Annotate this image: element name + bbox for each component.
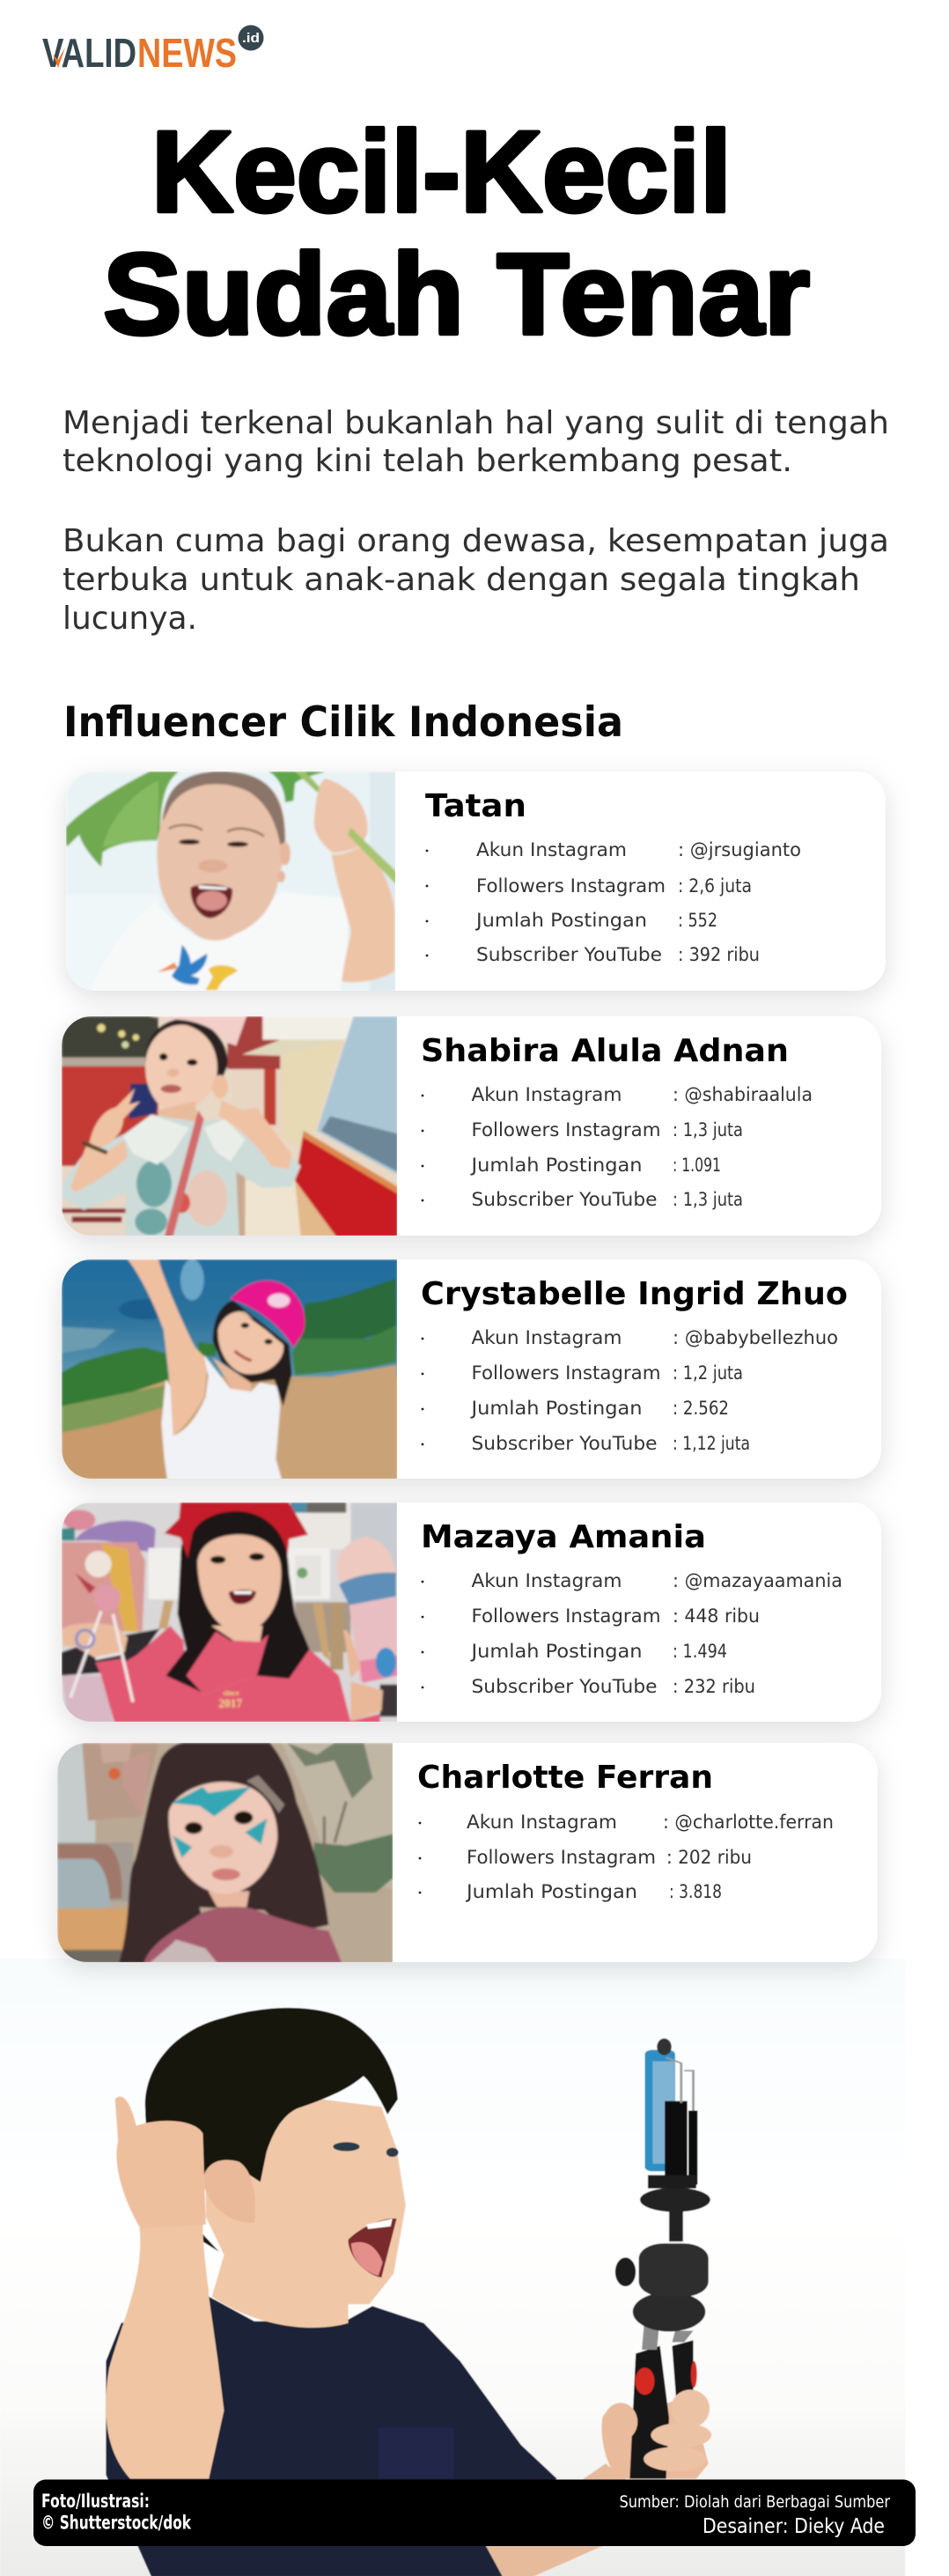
stats: Shabira: : 1.091: [673, 1155, 721, 1176]
stats: Crystabelle: Jumlah Postingan: [469, 1398, 643, 1419]
source and designer credit: Desainer: Dieky Ade: [703, 2515, 885, 2538]
panel: Mazaya Amania: [62, 1502, 881, 1723]
stats: Charlotte: : 3.818: [669, 1881, 722, 1902]
stats: Mazaya: : 232 ribu: [673, 1676, 755, 1697]
intro paragraph 2: Bukan cuma bagi orang dewasa, kesempatan juga: [63, 523, 889, 559]
section heading: Influencer Cilik Indonesia: [63, 698, 623, 747]
stats: Mazaya: Followers Instagram: [472, 1605, 660, 1627]
stats: Shabira: Akun Instagram: [472, 1084, 622, 1105]
title: Sudah Tenar: [103, 229, 810, 358]
photo credit: Foto/Ilustrasi:: [41, 2491, 150, 2512]
stats: Shabira: Followers Instagram: [472, 1119, 660, 1140]
photo: Tatan: [66, 771, 396, 992]
panel: Crystabelle Ingrid Zhuo: [62, 1259, 881, 1480]
stats: Shabira: : @shabiraalula: [673, 1084, 813, 1105]
name: Tatan: Tatan: [425, 788, 526, 824]
stats: Shabira: Jumlah Postingan: [469, 1155, 643, 1176]
name: Shabira: Shabira Alula Adnan: [421, 1033, 789, 1069]
stats: Charlotte: : @charlotte.ferran: [663, 1812, 834, 1833]
photo: Crystabelle: [62, 1259, 398, 1480]
stats: Shabira: : 1,3 juta: [673, 1119, 743, 1140]
photo credit: © Shutterstock/dok: [41, 2512, 192, 2533]
stats: Crystabelle: [422, 1327, 838, 1454]
stats: Tatan: Subscriber YouTube: [476, 944, 662, 965]
photo: Mazaya: 2017: [218, 1696, 242, 1709]
stats: Mazaya: : @mazayaamania: [673, 1570, 842, 1591]
stats: Mazaya: : 1.494: [673, 1641, 727, 1662]
stats: Mazaya: Akun Instagram: [472, 1570, 622, 1591]
stats: Mazaya: Subscriber YouTube: [472, 1676, 657, 1697]
stats: Tatan: Jumlah Postingan: [474, 910, 647, 931]
stats: Tatan: [426, 839, 801, 965]
photo: Charlotte: [57, 1743, 394, 1963]
stats: Tatan: : 552: [678, 910, 717, 931]
stats: Tatan: : 392 ribu: [678, 944, 760, 965]
source and designer credit: Sumber: Diolah dari Berbagai Sumber: [620, 2492, 890, 2512]
stats: Tatan: : @jrsugianto: [678, 839, 801, 860]
panel: Tatan: [66, 771, 886, 992]
intro paragraph 1: [63, 405, 889, 479]
intro paragraph 2: terbuka untuk anak-anak dengan segala tingkah: [63, 562, 860, 598]
stats: Tatan: Followers Instagram: [476, 875, 666, 897]
photo: Shabira: [62, 1016, 398, 1236]
stats: Shabira: : 1,3 juta: [673, 1189, 743, 1210]
stats: Mazaya: [422, 1570, 842, 1697]
stats: Charlotte: [419, 1812, 834, 1902]
stats: Mazaya: : 448 ribu: [673, 1605, 760, 1627]
credit bar: [33, 2480, 916, 2546]
stats: Charlotte: : 202 ribu: [666, 1847, 752, 1868]
stats: Mazaya: Jumlah Postingan: [469, 1641, 643, 1662]
name: Mazaya: Mazaya Amania: [421, 1519, 706, 1555]
bottom photo: boy filming himself with phone on tripod: [0, 1959, 905, 2576]
stats: Crystabelle: : 2.562: [673, 1398, 729, 1419]
stats: Crystabelle: : @babybellezhuo: [673, 1327, 838, 1348]
logo: Validnews.id: .id: [242, 31, 260, 46]
photo: Mazaya: since: [223, 1688, 239, 1697]
stats: Tatan: : 2,6 juta: [678, 875, 752, 897]
stats: Crystabelle: : 1,2 juta: [673, 1362, 743, 1384]
panel: Charlotte Ferran: [57, 1743, 878, 1963]
photo: Mazaya: [62, 1502, 398, 1723]
panel: Shabira Alula Adnan: [62, 1016, 881, 1236]
stats: Crystabelle: Akun Instagram: [472, 1327, 622, 1348]
intro paragraph 1: teknologi yang kini telah berkembang pesat.: [63, 443, 792, 479]
title: [103, 107, 810, 358]
stats: Tatan: Akun Instagram: [476, 839, 627, 860]
stats: Charlotte: Akun Instagram: [467, 1812, 617, 1833]
stats: Shabira: Subscriber YouTube: [472, 1189, 657, 1210]
stats: Crystabelle: : 1,12 juta: [673, 1433, 750, 1454]
logo: Validnews.id: [42, 25, 264, 76]
intro paragraph 2: lucunya.: [63, 601, 197, 637]
stats: Charlotte: Jumlah Postingan: [465, 1881, 637, 1902]
name: Charlotte: Charlotte Ferran: [417, 1760, 713, 1796]
name: Crystabelle: Crystabelle Ingrid Zhuo: [421, 1276, 848, 1312]
title: Kecil-Kecil: [151, 107, 732, 236]
stats: Charlotte: Followers Instagram: [467, 1847, 656, 1868]
intro paragraph 1: Menjadi terkenal bukanlah hal yang sulit di tengah: [63, 405, 889, 441]
intro paragraph 2: [63, 523, 889, 637]
source and designer credit: [620, 2492, 890, 2538]
stats: Shabira: [422, 1084, 813, 1210]
logo: Validnews.id: NEWS: [137, 30, 237, 76]
stats: Crystabelle: Subscriber YouTube: [472, 1433, 657, 1454]
stats: Crystabelle: Followers Instagram: [472, 1362, 660, 1384]
photo credit: [41, 2491, 192, 2533]
logo: Validnews.id: VALID: [42, 30, 136, 76]
